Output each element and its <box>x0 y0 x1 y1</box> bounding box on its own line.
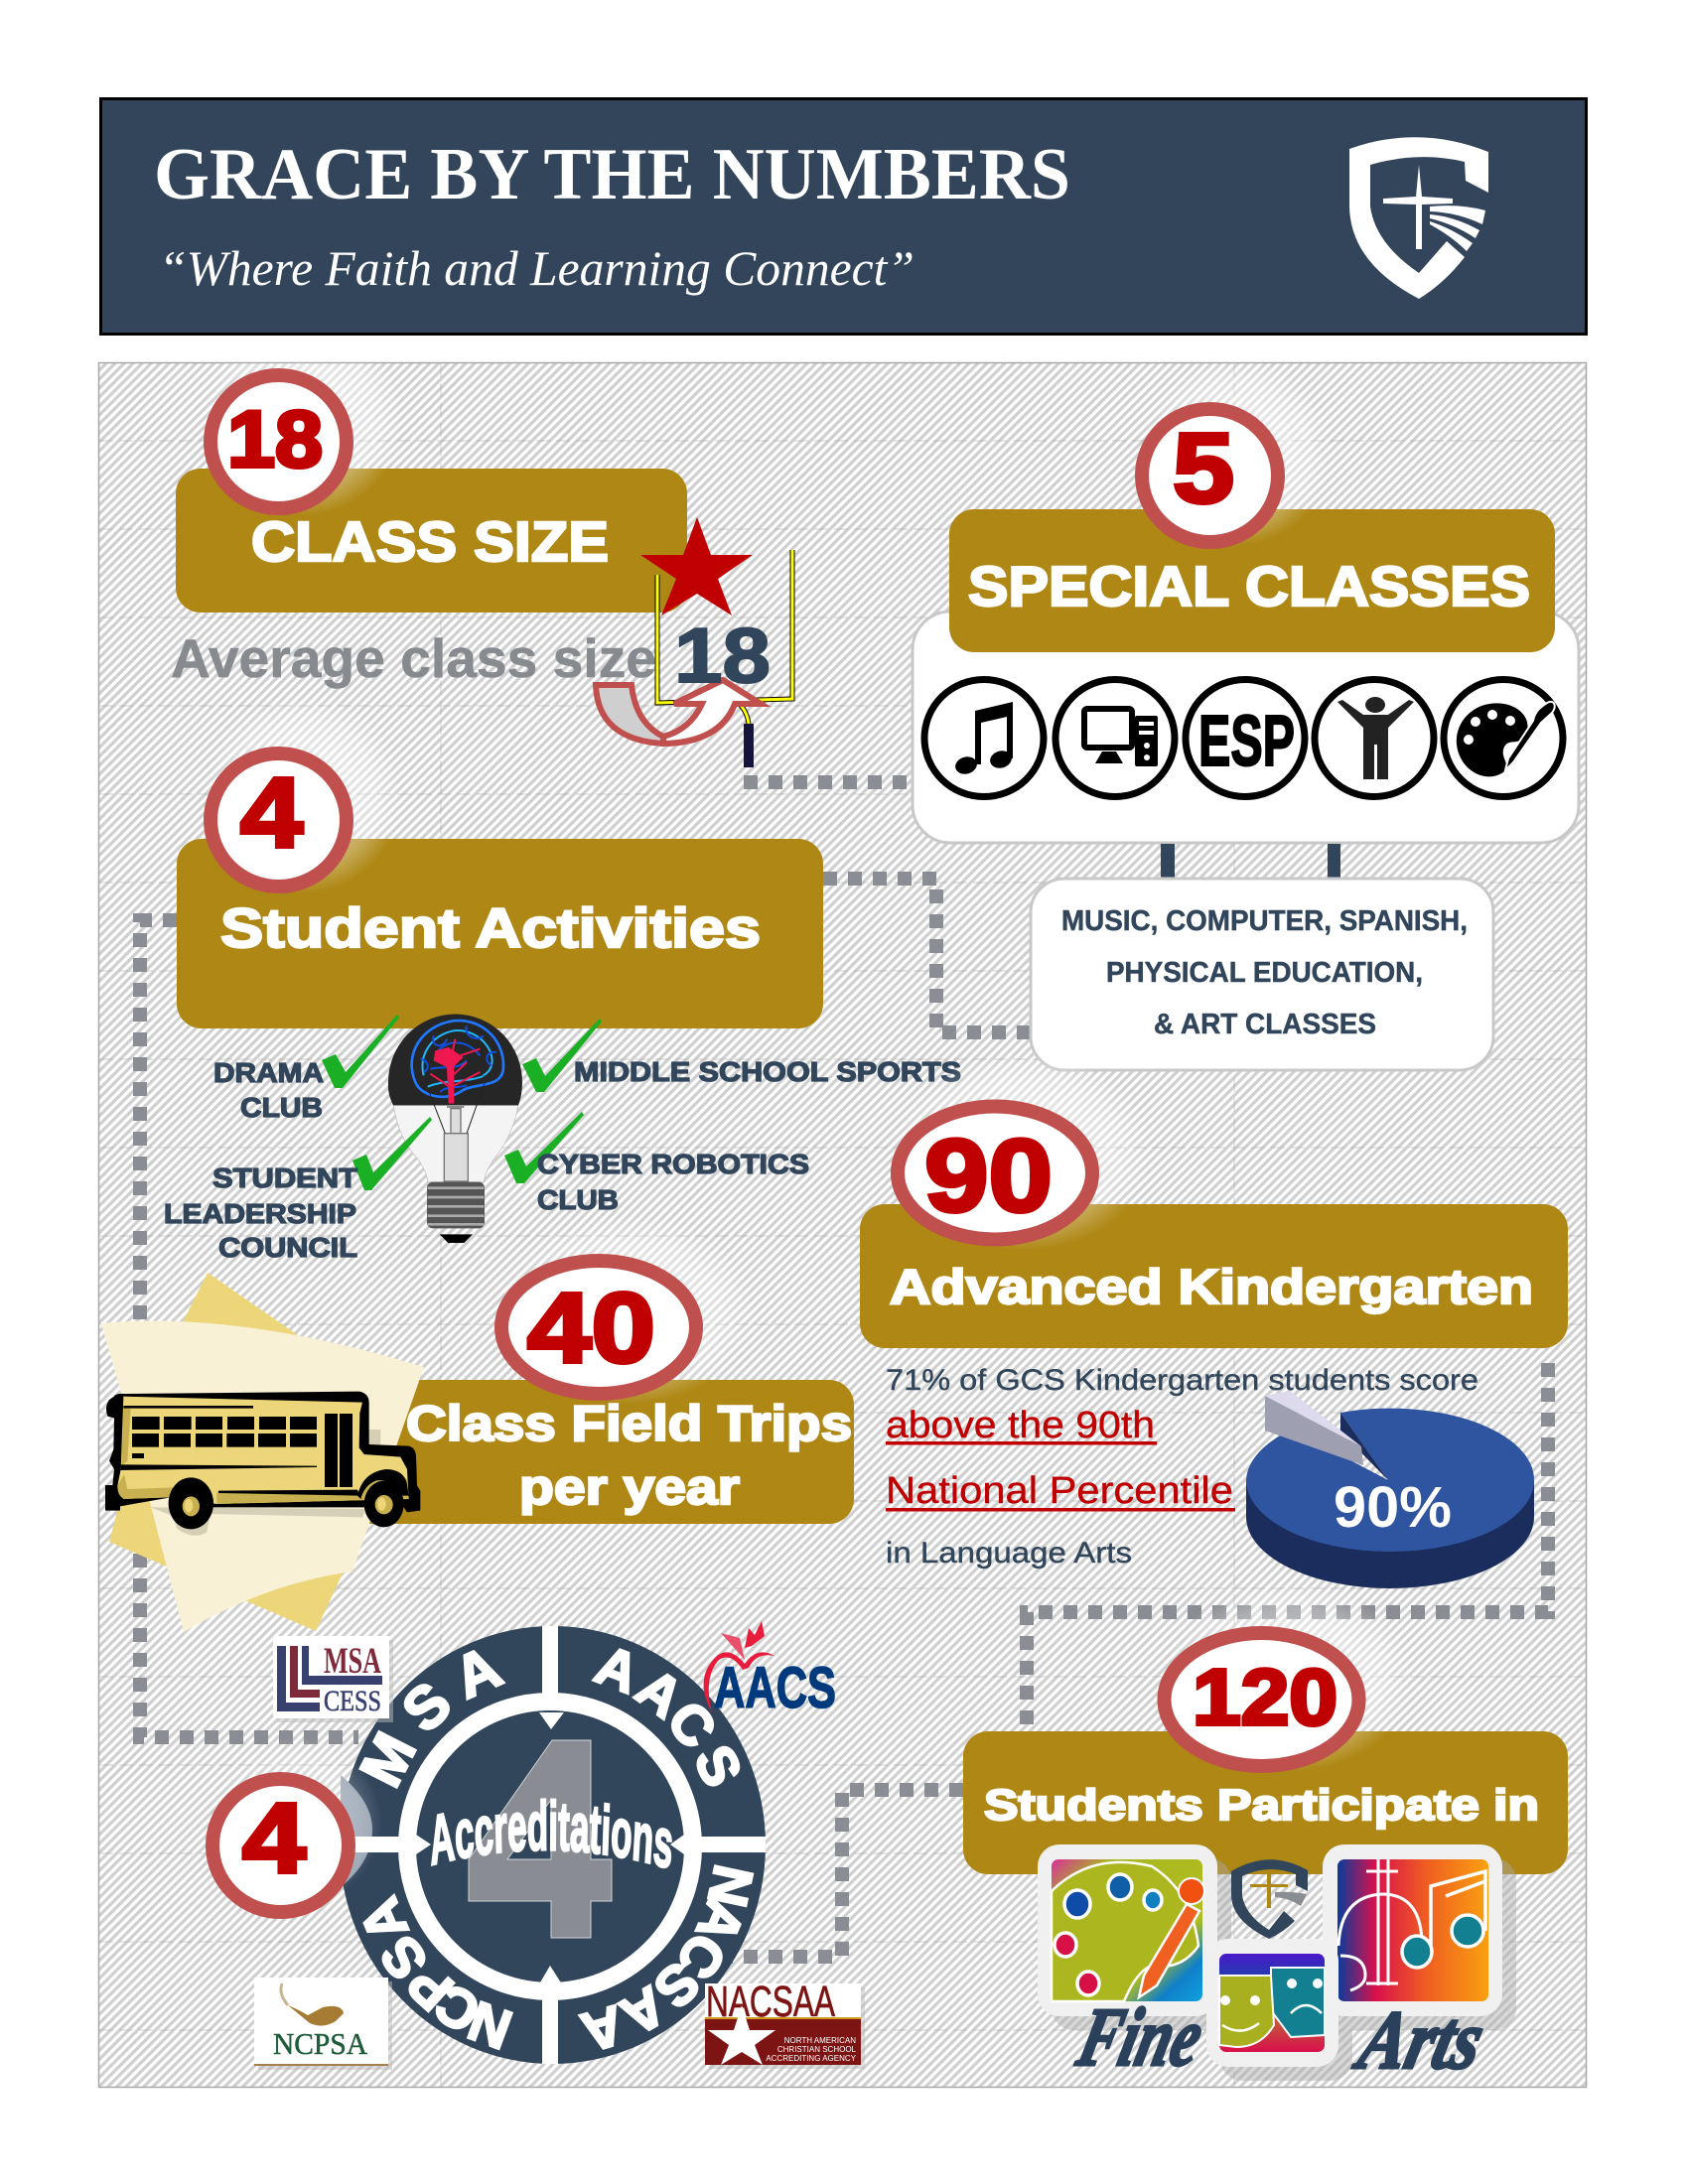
item: cyber robotics club <box>537 1149 809 1215</box>
logo: NCPSA <box>254 1978 392 2070</box>
logo: NACSAA: NORTH AMERICAN <box>784 2036 856 2045</box>
number badge: 5 <box>1142 409 1278 542</box>
icon: light bulb with brain <box>388 1014 522 1243</box>
heading: class field trips per year: Class Field Trips <box>406 1396 852 1451</box>
ring labels: MSA <box>347 1633 510 1797</box>
ring labels <box>347 1632 766 2065</box>
heading: accreditations: Accreditations <box>431 1798 672 1868</box>
number badge: 4 accreditations <box>212 1779 349 1912</box>
number badge: 90: 90 <box>924 1119 1053 1234</box>
icon: music <box>924 679 1044 796</box>
ring labels: NCPSA <box>347 1889 519 2062</box>
item: student leadership council: STUDENT <box>212 1162 357 1193</box>
icon: school bus <box>105 1392 420 1536</box>
text: kindergarten statistic: above the 90th <box>886 1405 1155 1446</box>
icon: paper sheets <box>101 1273 424 1632</box>
tile shadows <box>1052 1858 1516 2081</box>
logo: NACSAA: NACSAA <box>706 1978 835 2026</box>
big gray 4 <box>469 1740 612 1938</box>
icon: computer <box>1055 679 1175 796</box>
panel: student activities <box>164 695 961 1263</box>
number badge: 120: 120 <box>1193 1653 1337 1741</box>
panel: advanced kindergarten <box>860 1052 1568 1588</box>
caption card: PHYSICAL EDUCATION, <box>1106 957 1423 989</box>
logo: NCPSA: NCPSA <box>273 2026 368 2061</box>
title: GRACE BY THE NUMBERS <box>154 134 1070 215</box>
tagline: “Where Faith and Learning Connect” <box>159 240 914 296</box>
logo: MSA CESS: CESS <box>324 1685 381 1717</box>
logo: mini shield <box>1231 1859 1308 1939</box>
icon: spanish ESP: ESP <box>1198 702 1295 781</box>
pie chart: 90 percent <box>1246 1391 1534 1588</box>
logo: AACS: AACS <box>714 1656 836 1720</box>
panel: fine arts <box>963 1583 1568 2087</box>
ring labels: AACS <box>588 1632 755 1796</box>
icon: physical education <box>1315 679 1434 796</box>
caption card: & ART CLASSES <box>1154 1009 1376 1040</box>
icon: art palette <box>1444 679 1563 796</box>
check: drama club <box>322 1015 399 1088</box>
number badge: 90 <box>898 1106 1092 1239</box>
logo: MSA CESS: MSA <box>324 1641 381 1682</box>
number badge: 40 <box>501 1261 696 1394</box>
logo: AACS <box>704 1621 836 1720</box>
panel: class size <box>171 318 792 767</box>
item: drama club: DRAMA <box>213 1057 324 1088</box>
text: kindergarten statistic: in Language Arts <box>886 1537 1132 1570</box>
item: middle school sports: MIDDLE SCHOOL SPORTS <box>574 1056 961 1087</box>
item: student leadership council: LEADERSHIP <box>164 1198 356 1229</box>
text: kindergarten statistic: National Percentile <box>886 1470 1233 1512</box>
disc <box>340 1626 766 2064</box>
heading: special classes: SPECIAL CLASSES <box>968 555 1530 618</box>
heading: student activities: Student Activities <box>220 896 761 959</box>
heading: class field trips per year <box>406 1396 852 1515</box>
number badge: 18: 18 <box>227 395 323 484</box>
number badge: 40: 40 <box>527 1273 655 1384</box>
check: student leadership <box>352 1117 432 1190</box>
ring labels: NACSAA <box>575 1860 766 2065</box>
tile: painting <box>1038 1844 1217 2016</box>
icon: star <box>640 517 753 615</box>
heading: advanced kindergarten: Advanced Kindergarten <box>890 1261 1533 1314</box>
panel: special classes <box>913 357 1579 1070</box>
check: cyber robotics <box>504 1112 584 1183</box>
background panel <box>99 363 1587 2087</box>
pie chart: 90 percent: 90% <box>1334 1475 1452 1540</box>
tile: music <box>1323 1844 1502 2016</box>
dotted connectors <box>140 782 1548 1957</box>
item: student leadership council: COUNCIL <box>218 1232 357 1263</box>
item: drama club: CLUB <box>240 1092 323 1123</box>
number badge: 18 <box>211 375 347 508</box>
text: average class size: Average class size <box>171 627 656 689</box>
icon: school shield logo <box>1349 137 1488 299</box>
item: drama club <box>213 1057 324 1123</box>
number badge: 4: 4 <box>240 757 303 869</box>
text: kindergarten statistic: 71% of GCS Kindergarten students score <box>886 1364 1478 1397</box>
header banner <box>101 99 1587 334</box>
item: cyber robotics club: CYBER ROBOTICS <box>537 1149 809 1179</box>
number: 18 in goal: 18 <box>674 612 771 699</box>
check: middle school sports <box>522 1019 602 1092</box>
number badge: 4 accreditations: 4 <box>242 1783 306 1894</box>
panel: field trips <box>101 1216 854 1632</box>
text: arts: Arts <box>1346 1994 1492 2087</box>
number badge: 4 <box>211 753 347 887</box>
heading: class size: CLASS SIZE <box>251 510 609 574</box>
panel: accreditations <box>206 1621 865 2070</box>
item: student leadership council <box>164 1162 357 1263</box>
item: cyber robotics club: CLUB <box>537 1184 619 1215</box>
tile: theatre masks <box>1206 1939 1338 2067</box>
heading: students participate in: Students Participate in <box>984 1781 1539 1830</box>
text: fine: Fine <box>1069 1991 1211 2084</box>
number badge: 5: 5 <box>1173 413 1234 524</box>
logo: MSA CESS <box>273 1636 393 1722</box>
number badge: 120 <box>1164 1633 1358 1766</box>
caption card <box>1031 879 1493 1070</box>
icon: curved arrow <box>596 680 761 744</box>
logo: NACSAA: ACCREDITING AGENCY <box>766 2054 857 2063</box>
logo: NACSAA: CHRISTIAN SCHOOL <box>777 2045 857 2054</box>
heading: class field trips per year: per year <box>519 1459 740 1515</box>
white icon card <box>913 612 1579 843</box>
icon: spanish ESP <box>1186 679 1305 796</box>
icon: goal post <box>657 550 792 767</box>
text: kindergarten statistic <box>886 1364 1478 1570</box>
caption card: MUSIC, COMPUTER, SPANISH, <box>1061 905 1468 937</box>
connectors to caption <box>1161 844 1340 879</box>
logo: NACSAA <box>705 1978 865 2069</box>
